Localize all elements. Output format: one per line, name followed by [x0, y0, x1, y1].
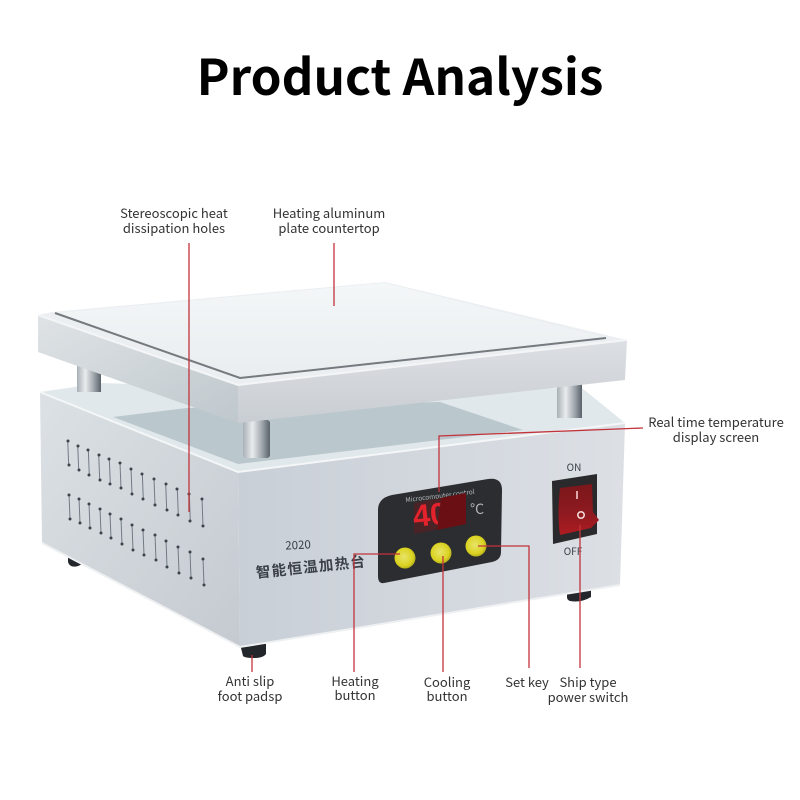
base bottom edge	[42, 543, 620, 647]
rocker off mark	[578, 512, 584, 518]
rocker on mark	[576, 491, 578, 499]
off label: OFF	[564, 543, 583, 558]
celsius mark: °C	[470, 499, 484, 519]
panel caption: Microcomputer control	[405, 486, 475, 504]
label: heat dissipation holes: Stereoscopic heat	[120, 203, 228, 222]
foot: right	[567, 584, 591, 602]
display screen	[414, 493, 466, 534]
plate frame right edge	[238, 340, 627, 423]
label: set key: Set key	[505, 672, 549, 691]
power switch	[552, 459, 599, 558]
base top surface	[40, 383, 625, 472]
panel background	[378, 479, 502, 583]
heating button	[394, 548, 416, 568]
label: cooling button: Cooling	[424, 672, 470, 691]
plate frame highlight	[38, 315, 627, 385]
post: right	[557, 380, 582, 418]
post: rear left	[77, 364, 101, 392]
hole ends	[66, 440, 206, 586]
product name: 智能恒温加热台	[255, 550, 367, 583]
base left face	[40, 392, 240, 647]
temperature digits: 40	[411, 496, 449, 534]
set button	[466, 536, 486, 556]
plate inner groove	[55, 313, 606, 378]
label: foot pads: foot padsp	[218, 686, 282, 705]
label: power switch: power switch	[548, 687, 628, 706]
product model number: 2020	[285, 536, 311, 554]
switch bezel	[552, 474, 597, 544]
post: front	[243, 420, 270, 458]
foot: front	[240, 644, 266, 658]
label: heating button: Heating	[331, 671, 379, 690]
base top edge highlight	[40, 392, 625, 472]
leader lines	[189, 243, 643, 672]
on label: ON	[567, 459, 581, 474]
plate frame top	[38, 282, 627, 385]
aluminum plate surface	[55, 283, 606, 378]
rocker	[558, 484, 599, 535]
control panel	[378, 479, 502, 583]
label: temperature display: Real time temperature	[648, 412, 784, 431]
label: cooling button: button	[426, 686, 468, 705]
label: aluminum plate: plate countertop	[278, 218, 380, 237]
title: Product Analysis	[197, 39, 603, 110]
base right face	[238, 423, 625, 647]
product illustration: heating station	[38, 282, 627, 658]
plate frame left edge	[38, 315, 238, 423]
foot: rear left	[68, 552, 82, 567]
label: foot pads: Anti slip	[226, 671, 274, 690]
display shade	[437, 493, 466, 530]
label: power switch: Ship type	[559, 672, 617, 691]
heat dissipation holes	[68, 440, 204, 585]
cooling button	[430, 542, 452, 564]
label: heat dissipation holes: dissipation holes	[123, 218, 225, 237]
label: heating button: button	[334, 685, 376, 704]
label: temperature display: display screen	[673, 427, 759, 446]
label: aluminum plate: Heating aluminum	[273, 203, 385, 222]
shadow under plate	[113, 402, 523, 464]
